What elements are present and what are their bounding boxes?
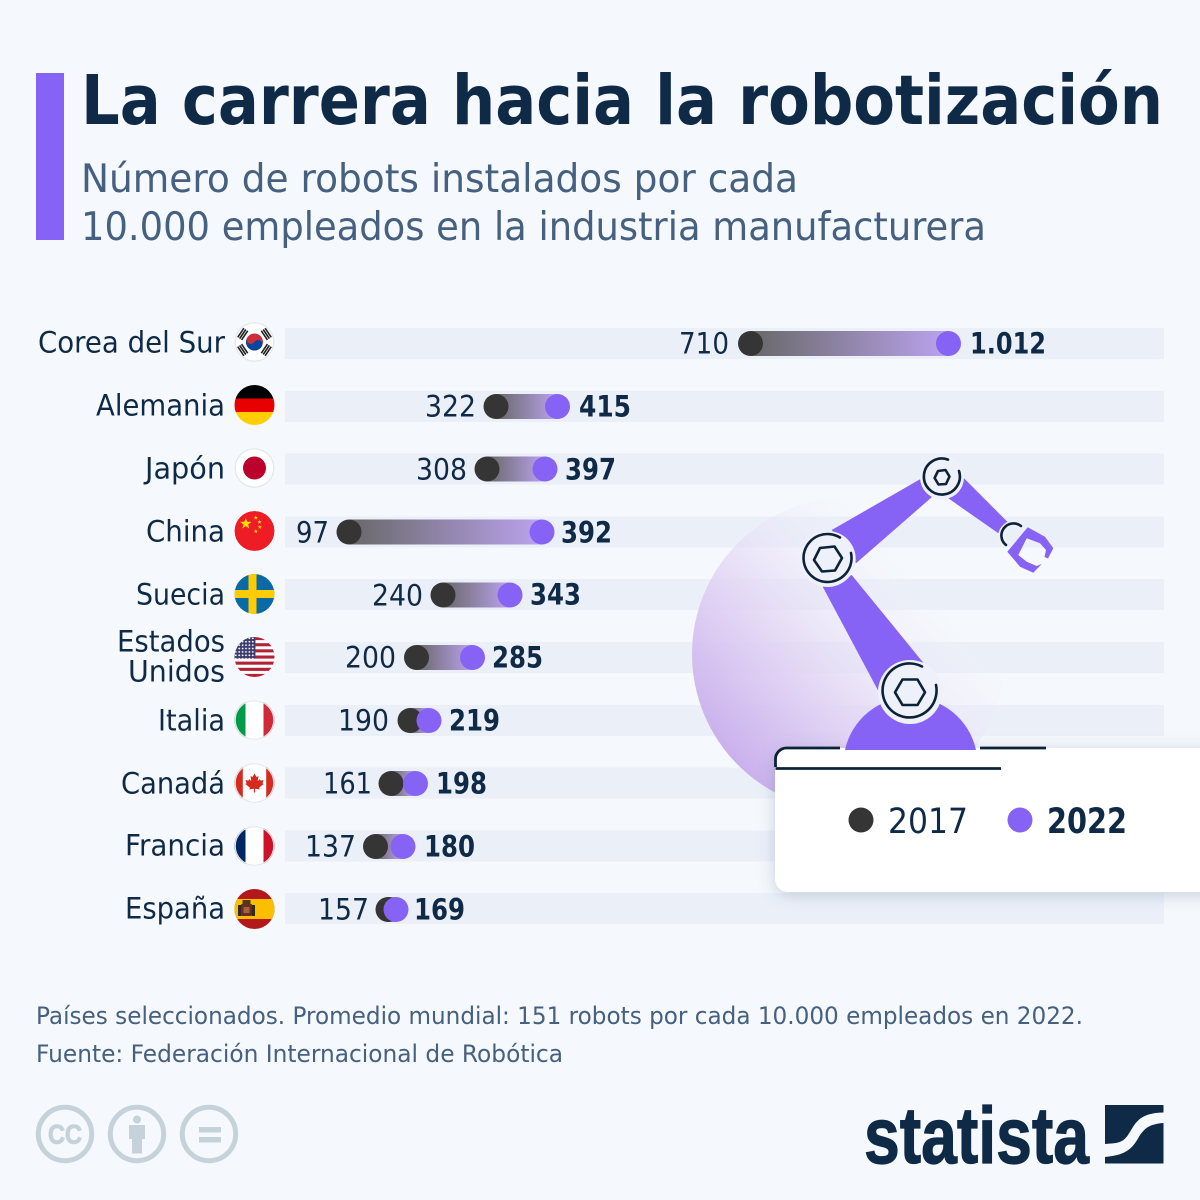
legend: 2022: 2022 <box>1047 802 1127 842</box>
row: Alemania: 415 <box>579 390 631 424</box>
icon: creative commons <box>38 1107 92 1161</box>
legend card <box>775 748 1200 892</box>
robot joint: base <box>878 660 942 724</box>
robot joint: wrist <box>920 455 964 499</box>
row: Italia: 219 <box>449 704 500 738</box>
row: Estados Unidos <box>120 629 1164 682</box>
row: Estados Unidos: Unidos <box>128 654 225 688</box>
robot arm segments <box>823 478 1007 692</box>
row: Italia: Italia <box>158 703 225 737</box>
row: Alemania <box>96 385 1164 425</box>
header accent bar <box>36 73 64 240</box>
row: Canadá: 161 <box>323 767 372 801</box>
statista wordmark: statista <box>864 1091 1089 1180</box>
row: Corea del Sur: Corea del Sur <box>38 325 226 359</box>
robot gripper <box>1007 527 1053 573</box>
row: Suecia: 343 <box>530 578 581 612</box>
row: China: China <box>146 514 225 548</box>
source: Fuente: Federación Internacional de Robótica <box>36 1040 563 1068</box>
icon: no derivatives <box>182 1107 236 1161</box>
row: Corea del Sur: 1.012 <box>970 327 1046 361</box>
row: Japón: 397 <box>565 453 616 487</box>
illustration: backdrop circle <box>692 497 1006 811</box>
row: España <box>125 889 1164 929</box>
row: Italia: 190 <box>338 704 389 738</box>
icon: attribution <box>110 1107 164 1161</box>
flag: Italy <box>234 700 274 740</box>
row: Alemania: 322 <box>425 390 476 424</box>
flag: Spain <box>234 889 274 929</box>
row: Suecia: Suecia <box>136 577 225 611</box>
row: Japón: 308 <box>416 453 467 487</box>
row: Francia: 137 <box>305 830 356 864</box>
row: España: 157 <box>318 893 369 927</box>
legend card lines <box>776 748 1046 768</box>
row: Suecia <box>136 574 1164 614</box>
row: China: 392 <box>561 516 612 550</box>
footnote: Países seleccionados. Promedio mundial: 151 robots por cada 10.000 empleados en 2022. <box>36 1002 1083 1030</box>
statista logo mark <box>1105 1105 1164 1164</box>
flag: Canada <box>234 763 274 803</box>
legend: 2017: 2017 <box>888 802 968 842</box>
row: Canadá <box>122 763 775 803</box>
row: China: 97 <box>296 516 329 550</box>
illustration: robot arm <box>800 455 1053 750</box>
row: Estados Unidos: Estados <box>117 624 225 658</box>
row: Suecia: 240 <box>372 579 423 613</box>
row: España: España <box>125 891 225 925</box>
flag: France <box>234 826 274 866</box>
flag: China <box>234 511 274 551</box>
robot joint: elbow <box>800 531 856 587</box>
flag: United States <box>234 637 274 677</box>
row: China <box>146 511 1164 551</box>
legend: 2022 <box>1008 802 1127 842</box>
row: Corea del Sur: 710 <box>679 327 729 361</box>
flag: Germany <box>234 385 274 425</box>
row: Estados Unidos: 200 <box>345 641 396 675</box>
subtitle: Número de robots instalados por cada <box>81 157 798 202</box>
icon: creative commons: CC <box>48 1120 82 1150</box>
row: Francia: Francia <box>125 828 225 862</box>
row: Francia: 180 <box>424 830 475 864</box>
row: Estados Unidos: 285 <box>492 641 543 675</box>
subtitle: 10.000 empleados en la industria manufacturera <box>81 205 986 250</box>
row: Francia <box>128 826 775 866</box>
robot joint: gripper <box>1001 523 1022 546</box>
row: España: 169 <box>414 893 465 927</box>
row: Japón: Japón <box>143 451 225 485</box>
row: Japón <box>143 448 1164 488</box>
row: Corea del Sur <box>38 322 1164 362</box>
flag: Sweden <box>234 574 274 614</box>
row: Canadá: Canadá <box>121 766 225 800</box>
row: Italia <box>158 700 1164 740</box>
legend: 2017 <box>848 802 968 842</box>
flag: South Korea <box>234 322 274 362</box>
robot base <box>845 697 976 750</box>
flag: Japan <box>234 448 274 488</box>
row: Alemania: Alemania <box>96 388 225 422</box>
subtitle <box>81 157 986 250</box>
row: Canadá: 198 <box>436 767 487 801</box>
